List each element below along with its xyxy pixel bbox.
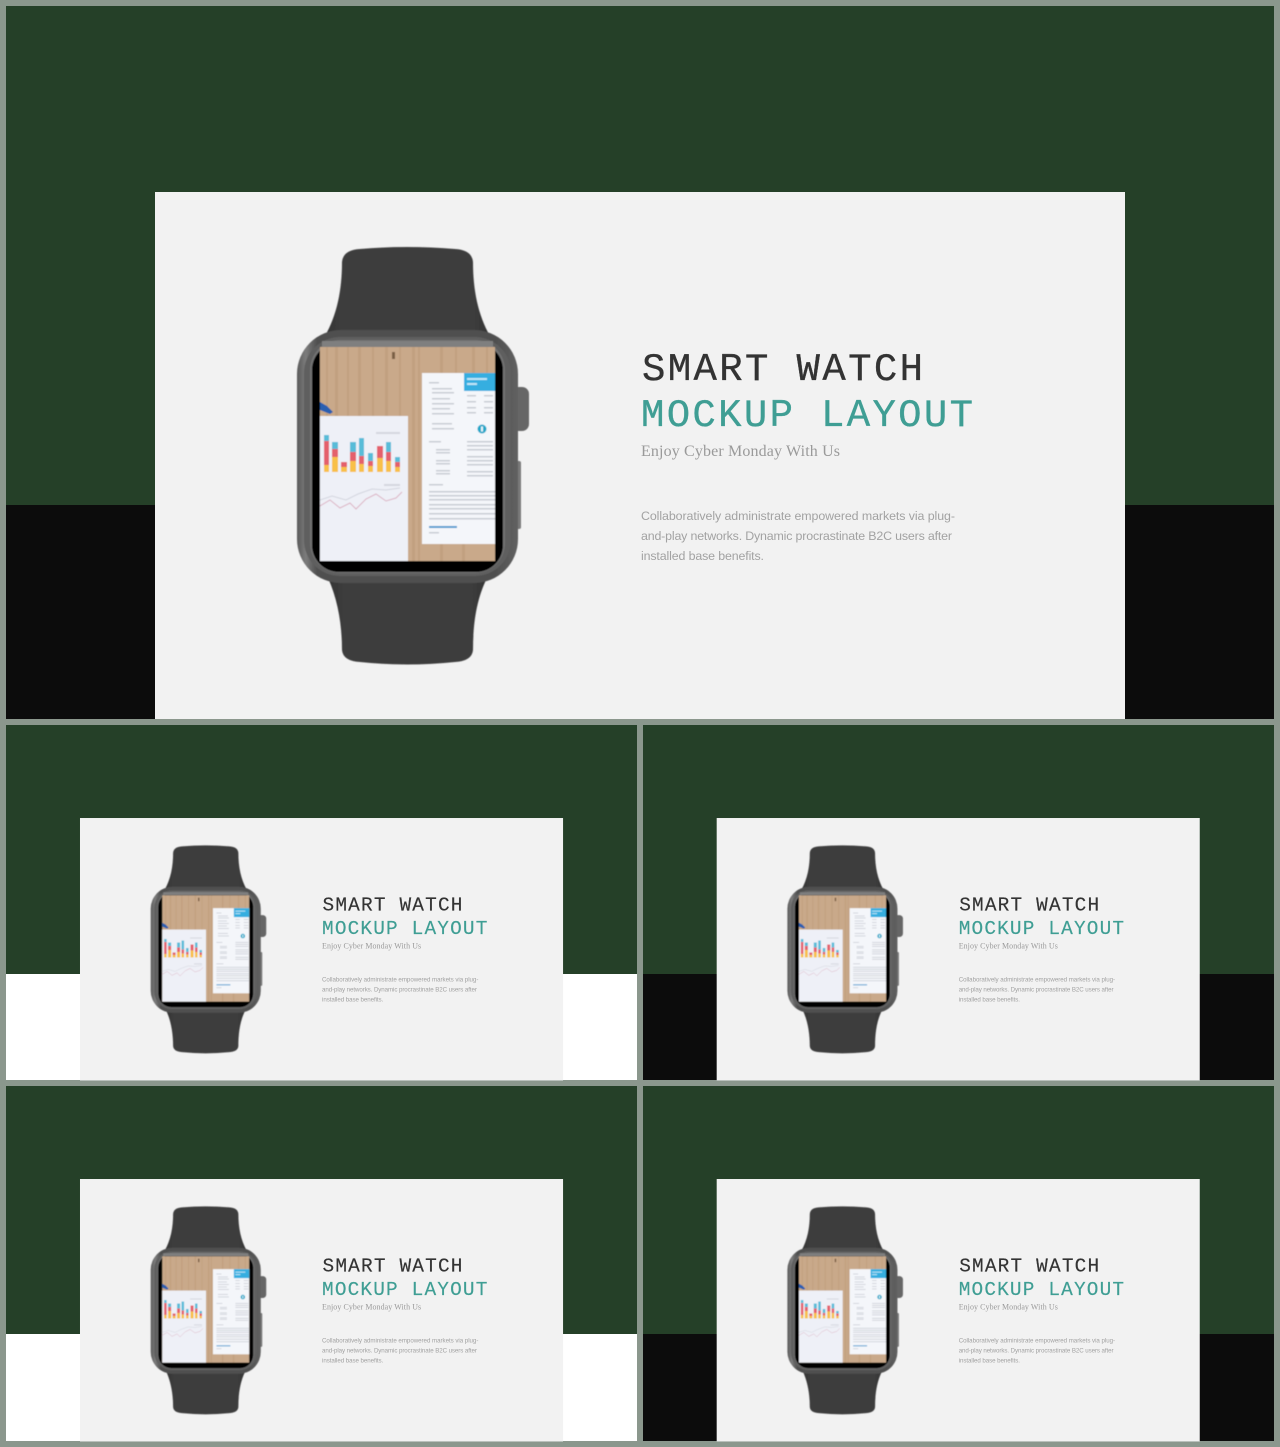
top left: body text: Collaboratively administrate empowered markets via plug- <box>322 976 478 983</box>
bottom left: white band <box>6 1334 637 1441</box>
bottom right: black band <box>643 1334 1274 1441</box>
large slide: heading line two: MOCKUP LAYOUT <box>641 394 973 438</box>
small slide: top right <box>643 725 1274 1080</box>
large slide: light panel <box>155 192 1125 719</box>
bottom right: body text: installed base benefits. <box>959 1357 1020 1364</box>
large slide: body text: and-play networks. Dynamic procrastinate B2C users after <box>641 529 952 543</box>
bottom right: body text: Collaboratively administrate empowered markets via plug- <box>959 1337 1115 1344</box>
bottom left: body text: installed base benefits. <box>322 1357 384 1364</box>
bottom left: subtitle: Enjoy Cyber Monday With Us <box>322 1302 421 1311</box>
top right: body text: installed base benefits. <box>959 996 1020 1003</box>
top left: smart watch mockup <box>151 845 266 1053</box>
large slide: smart watch mockup <box>297 247 529 664</box>
small slide: bottom right <box>643 1086 1274 1441</box>
bottom left: heading line two: MOCKUP LAYOUT <box>322 1279 487 1301</box>
top right: body text <box>959 976 1115 1003</box>
top right: heading line one: SMART WATCH <box>959 895 1099 917</box>
top left: heading line one: SMART WATCH <box>323 895 462 917</box>
bottom left: body text <box>322 1337 478 1364</box>
top left: heading line two: MOCKUP LAYOUT <box>322 918 487 940</box>
large slide: heading line one: SMART WATCH <box>642 348 923 392</box>
bottom left: smart watch mockup <box>151 1206 266 1414</box>
bottom right: light panel <box>717 1179 1200 1441</box>
small slide: top left <box>6 725 637 1080</box>
bottom right: heading line two: MOCKUP LAYOUT <box>959 1279 1124 1301</box>
bottom left: green background <box>6 1086 637 1334</box>
large slide <box>6 6 1274 719</box>
top right: light panel <box>717 818 1200 1080</box>
top right: green background <box>643 725 1274 974</box>
bottom right: heading line one: SMART WATCH <box>959 1256 1099 1278</box>
large slide: green background <box>6 6 1274 505</box>
large slide: black band <box>6 505 1274 719</box>
bottom right: green background <box>643 1086 1274 1334</box>
bottom right: body text <box>959 1337 1115 1364</box>
bottom left: heading line one: SMART WATCH <box>323 1256 462 1278</box>
top right: subtitle: Enjoy Cyber Monday With Us <box>959 941 1058 950</box>
large slide: body text <box>641 509 955 563</box>
small slide: bottom left <box>6 1086 637 1441</box>
top left: green background <box>6 725 637 974</box>
top right: heading line two: MOCKUP LAYOUT <box>959 918 1124 940</box>
top left: body text <box>322 976 478 1003</box>
bottom left: body text: and-play networks. Dynamic procrastinate B2C users after <box>322 1347 477 1354</box>
bottom right: smart watch mockup <box>787 1206 903 1414</box>
top left: light panel <box>80 818 563 1080</box>
large slide: body text: installed base benefits. <box>641 549 764 563</box>
top left: body text: and-play networks. Dynamic procrastinate B2C users after <box>322 986 477 993</box>
large slide: body text: Collaboratively administrate empowered markets via plug- <box>641 509 955 523</box>
top left: white band <box>6 974 637 1080</box>
bottom left: light panel <box>80 1179 563 1441</box>
large slide: subtitle: Enjoy Cyber Monday With Us <box>641 443 840 460</box>
top right: smart watch mockup <box>787 845 903 1053</box>
top left: subtitle: Enjoy Cyber Monday With Us <box>322 941 421 950</box>
top right: black band <box>643 974 1274 1080</box>
bottom right: body text: and-play networks. Dynamic procrastinate B2C users after <box>959 1347 1114 1354</box>
bottom right: subtitle: Enjoy Cyber Monday With Us <box>959 1302 1058 1311</box>
bottom left: body text: Collaboratively administrate empowered markets via plug- <box>322 1337 478 1344</box>
top left: body text: installed base benefits. <box>322 996 384 1003</box>
top right: body text: and-play networks. Dynamic procrastinate B2C users after <box>959 986 1114 993</box>
top right: body text: Collaboratively administrate empowered markets via plug- <box>959 976 1115 983</box>
